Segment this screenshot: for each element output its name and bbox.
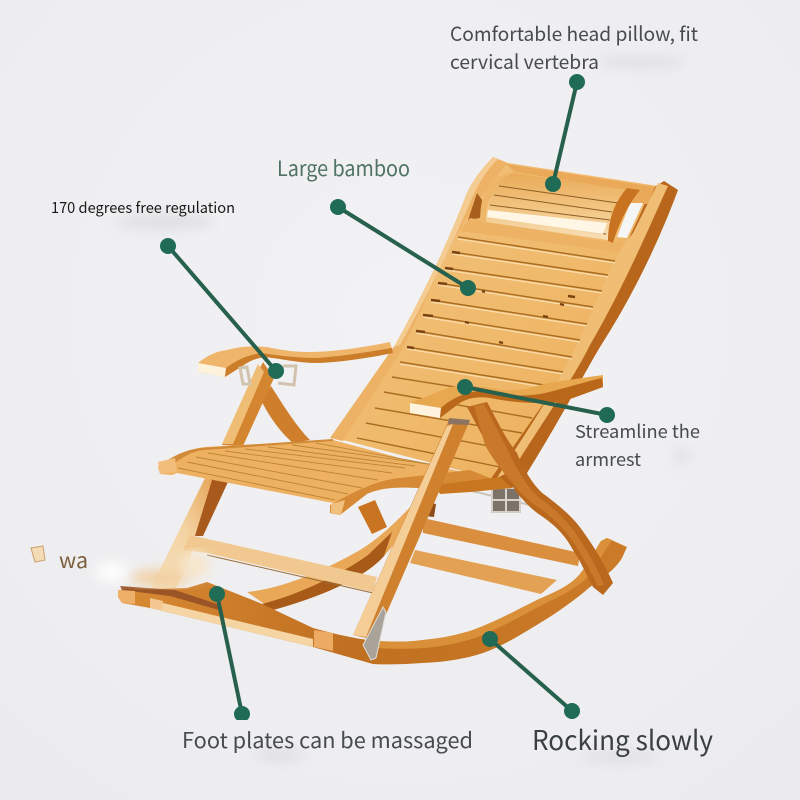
far rocker [247, 503, 414, 610]
left armrest [198, 342, 393, 377]
pointer: armrest [465, 387, 607, 415]
left curved rear leg [260, 386, 310, 443]
left rail [330, 157, 508, 441]
backrest slat gaps [357, 237, 615, 467]
label: rocking slowly: Rocking slowly [532, 719, 713, 758]
label: wa: wa [59, 545, 88, 575]
slat notches [407, 252, 575, 348]
foot plate mesh [120, 586, 219, 610]
label: large bamboo: Large bamboo [277, 153, 410, 183]
rear crossbar lower [410, 550, 557, 594]
pillow lines [487, 186, 618, 234]
label: head pillow: cervical vertebra [450, 46, 599, 75]
small dark stop behind long leg [424, 502, 436, 517]
pillow body [486, 173, 628, 240]
under-seat leg right [358, 500, 387, 534]
label: foot plates: Foot plates can be massaged [182, 724, 473, 755]
gap beside pillow left [468, 193, 482, 220]
right curved leg face [474, 404, 604, 586]
rocker highlight [377, 538, 612, 649]
right rail dark edge [490, 181, 678, 488]
far rocker shadow [262, 532, 392, 610]
top crossbar [506, 164, 655, 204]
pointer lines [168, 82, 607, 714]
left armrest bracket [240, 366, 296, 385]
pillow shine [487, 210, 607, 234]
backrest board [343, 163, 658, 480]
left rail highlight [394, 157, 498, 347]
label: armrest: armrest [575, 446, 641, 472]
right curved leg [467, 402, 613, 595]
armrest hinge [448, 418, 470, 425]
icon: small cream tag [31, 546, 45, 562]
pointer: head pillow [553, 82, 577, 184]
seat right block [331, 500, 345, 515]
seat slat lines [178, 443, 445, 500]
backrest slat highlights [400, 239, 615, 389]
chair [96, 157, 678, 664]
rear crossbar upper [423, 518, 580, 566]
rocker block [314, 630, 333, 651]
faded leg [150, 478, 212, 590]
label: 170 degrees: 170 degrees free regulation [51, 197, 235, 218]
pointer: rocking [490, 639, 572, 711]
right rail face [497, 183, 668, 478]
pillow right cap [608, 188, 640, 243]
crossbar edge [207, 555, 373, 593]
left front arm leg highlight [222, 364, 264, 444]
seat back edge [160, 439, 333, 466]
seat under rail [435, 477, 512, 494]
blurred foot edit [96, 551, 210, 586]
pointer dots [160, 74, 615, 722]
foot plate front block [118, 590, 135, 604]
foot plate block 2 [150, 598, 163, 610]
seat front right curve [330, 470, 490, 515]
right armrest [410, 375, 603, 418]
right long leg [353, 420, 470, 640]
main rocker [118, 538, 627, 664]
label: armrest: Streamline the [575, 418, 700, 444]
pointer: 170 degrees [168, 246, 276, 371]
head pillow [480, 172, 640, 243]
pointer: foot plates [217, 594, 242, 714]
gap beside pillow right [617, 203, 643, 238]
metal bracket under seat [468, 488, 530, 512]
pointer: large bamboo [338, 207, 468, 288]
silver foot bracket [363, 607, 386, 660]
pillow left cap [480, 172, 515, 224]
text-removal smudges [115, 56, 690, 763]
pillow board [460, 218, 627, 252]
foot plate cream band [150, 603, 313, 647]
front crossbar [183, 535, 377, 592]
seat [158, 440, 512, 515]
under-seat leg left [191, 478, 228, 536]
left front arm leg upper [222, 362, 274, 446]
seat front left block [158, 458, 177, 474]
right long leg highlight [353, 424, 453, 637]
label: head pillow: Comfortable head pillow, fit [450, 18, 699, 47]
